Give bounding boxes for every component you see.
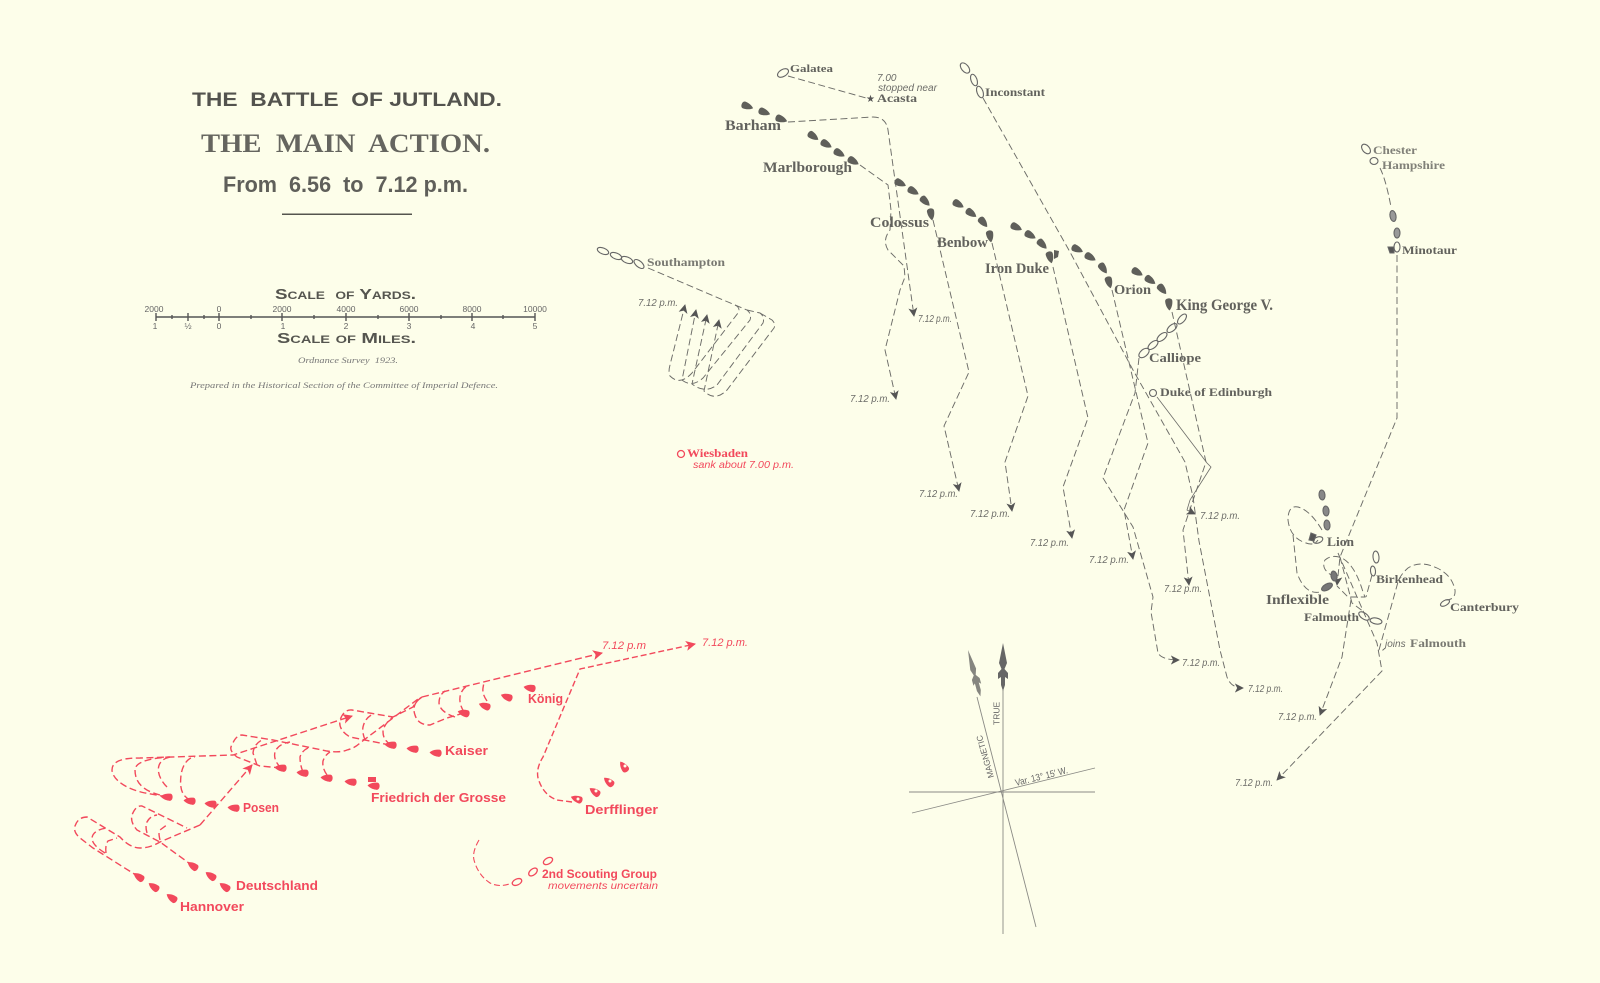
track: falmouth short	[1340, 557, 1364, 612]
yards labels: 2000	[145, 304, 164, 314]
track: southampton 2	[682, 305, 751, 384]
track: duke of edinburgh	[1157, 397, 1211, 514]
label: barham: Barham	[725, 118, 782, 134]
ships: inflexible and birkenhead	[1320, 551, 1380, 593]
track: inner loop	[1324, 556, 1365, 597]
ships: barham squadron	[740, 101, 788, 125]
ships: king george v squadron	[1130, 266, 1173, 311]
label: calliope: Calliope	[1149, 351, 1202, 365]
label: acasta: Acasta	[877, 93, 917, 105]
label: falmouth join: Falmouth	[1410, 638, 1467, 650]
track: friedrich lead	[231, 699, 418, 768]
label: orion: Orion	[1114, 283, 1151, 298]
ships: derfflinger squadron	[570, 760, 630, 804]
track: colossus	[933, 220, 969, 491]
note: stopped near: stopped near	[878, 83, 938, 94]
label: wiesbaden: Wiesbaden	[687, 448, 749, 460]
track: kaiser loops	[340, 697, 422, 745]
label: true: TRUE	[992, 702, 1002, 725]
note: acasta time: 7.00	[877, 73, 897, 84]
credit: historical section: Prepared in the Historical Section of the Committee of Imperial Defence.	[189, 380, 498, 390]
yards labels: 0	[217, 304, 222, 314]
track: deutschland loops	[146, 815, 168, 840]
ships: hannover squadron	[132, 870, 179, 904]
time: derfflinger: 7.12 p.m.	[702, 637, 748, 649]
label: deutschland: Deutschland	[236, 878, 318, 893]
miles labels: 0	[217, 321, 222, 331]
miles labels: 5	[533, 321, 538, 331]
time: calliope: 7.12 p.m.	[1182, 658, 1220, 669]
ships: konig squadron	[457, 683, 536, 718]
scale line and ticks	[156, 313, 535, 321]
time: duke of edinburgh: 7.12 p.m.	[1200, 511, 1240, 522]
label: iron duke: Iron Duke	[985, 261, 1049, 277]
label: canterbury: Canterbury	[1450, 602, 1519, 614]
ships: 2nd scouting group	[511, 856, 554, 887]
miles labels: 4	[471, 321, 476, 331]
time: inconstant: 7.12 p.m.	[1248, 684, 1283, 695]
track: falmouth	[1320, 600, 1351, 715]
note: movements uncertain: movements uncertain	[548, 880, 658, 892]
time: konig: 7.12 p.m	[602, 640, 646, 652]
track: 2nd scouting group	[474, 840, 512, 886]
miles labels: 2	[344, 321, 349, 331]
ship: duke of edinburgh	[1150, 390, 1156, 396]
label: king george v: King George V.	[1176, 297, 1273, 314]
yards labels: 6000	[400, 304, 419, 314]
miles labels	[153, 321, 538, 331]
yards labels: 10000	[523, 304, 547, 314]
label: benbow: Benbow	[937, 235, 988, 251]
german labels	[180, 637, 748, 914]
compass lines	[909, 690, 1095, 934]
yards labels: 8000	[463, 304, 482, 314]
note: joins: joins	[1383, 639, 1406, 650]
scale bar	[145, 286, 547, 390]
ships: falmouth and canterbury	[1357, 598, 1451, 625]
label: hannover: Hannover	[180, 899, 244, 914]
track: posen loops	[135, 757, 195, 800]
credit: ordnance survey: Ordnance Survey 1923.	[298, 355, 398, 365]
track: galatea to acasta	[788, 76, 866, 98]
label: variation: Var. 13° 15′ W.	[1014, 765, 1069, 789]
label: lion: Lion	[1327, 534, 1355, 549]
label: derfflinger: Derfflinger	[585, 802, 658, 817]
miles labels: 1	[281, 321, 286, 331]
label: marlborough: Marlborough	[763, 160, 853, 176]
ships: chester, hampshire, minotaur	[1360, 143, 1400, 253]
track: deutschland	[132, 765, 252, 866]
ships: deutschland squadron	[186, 859, 232, 893]
label: posen: Posen	[243, 800, 279, 815]
yards labels: 4000	[337, 304, 356, 314]
track: hannover	[75, 817, 200, 877]
ships: marlborough squadron	[806, 130, 860, 167]
ships: benbow squadron	[951, 198, 995, 243]
arrow: true north	[998, 643, 1008, 691]
heading: scale of yards: Scale of Yards.	[275, 286, 416, 303]
wiesbaden	[678, 448, 794, 471]
track: southampton 1	[648, 268, 739, 380]
track: chester to minotaur	[1337, 168, 1397, 585]
label: southampton: Southampton	[647, 257, 726, 269]
time: king george v: 7.12 p.m.	[1164, 584, 1202, 595]
ships: orion squadron	[1070, 243, 1114, 289]
track: hannover loops	[92, 828, 117, 853]
track: konig main line	[422, 653, 602, 697]
ship: wiesbaden	[678, 450, 684, 458]
ships: colossus squadron	[893, 177, 936, 221]
time: barham: 7.12 p.m.	[918, 314, 952, 325]
label: chester: Chester	[1373, 145, 1417, 157]
ships: iron duke squadron	[1009, 221, 1059, 264]
time: lion: 7.12 p.m.	[1235, 778, 1273, 789]
label: birkenhead: Birkenhead	[1376, 574, 1444, 586]
yards labels	[145, 304, 547, 314]
track: southampton 3	[692, 310, 764, 389]
track: inconstant	[983, 98, 1243, 688]
time: falmouth: 7.12 p.m.	[1278, 712, 1317, 723]
note: sank about 7.00 p.m.: sank about 7.00 p.m.	[693, 459, 794, 471]
miles labels: ½	[184, 321, 192, 331]
title block	[192, 89, 502, 215]
british labels	[647, 63, 1519, 650]
compass	[909, 643, 1095, 934]
yards labels: 2000	[273, 304, 292, 314]
track: calliope	[1103, 358, 1179, 660]
miles labels: 1	[153, 321, 158, 331]
time: orion: 7.12 p.m.	[1089, 555, 1129, 566]
german fleet tracks	[75, 644, 695, 886]
label: colossus: Colossus	[870, 215, 929, 231]
track: derfflinger	[538, 644, 695, 802]
time: benbow: 7.12 p.m.	[970, 509, 1010, 520]
label: minotaur: Minotaur	[1402, 245, 1457, 257]
track: konig loops	[414, 682, 487, 725]
subtitle: the main action: THE MAIN ACTION.	[201, 129, 490, 158]
label: kaiser: Kaiser	[445, 743, 488, 758]
time: iron duke: 7.12 p.m.	[1030, 538, 1069, 549]
track: benbow	[992, 243, 1028, 511]
label: 2nd scouting group: 2nd Scouting Group	[542, 867, 657, 881]
ships: posen squadron	[160, 793, 240, 812]
track: inflexible	[1293, 535, 1327, 592]
heading: scale of miles: Scale of Miles.	[277, 330, 416, 347]
british time labels	[638, 298, 1317, 789]
ships: kaiser squadron	[384, 741, 442, 757]
miles labels: 3	[407, 321, 412, 331]
track: lion loop	[1288, 507, 1322, 544]
track: marlborough	[860, 165, 905, 399]
track: friedrich loops	[253, 740, 330, 775]
label: hampshire: Hampshire	[1382, 160, 1445, 172]
label: galatea: Galatea	[790, 63, 834, 75]
time: southampton: 7.12 p.m.	[638, 298, 678, 309]
track: birkenhead	[1366, 575, 1372, 597]
label: friedrich der grosse: Friedrich der Grosse	[371, 790, 506, 805]
title: the battle of jutland: THE BATTLE OF JUTLAND.	[192, 89, 502, 111]
track: iron duke	[1053, 267, 1088, 538]
label: konig: König	[528, 691, 563, 706]
ships: galatea and inconstant	[776, 61, 985, 99]
track: king george v	[1172, 312, 1206, 585]
ships: southampton squadron	[596, 246, 646, 270]
title rule	[282, 214, 412, 215]
label: falmouth: Falmouth	[1304, 612, 1360, 624]
time: marlborough: 7.12 p.m.	[850, 394, 890, 405]
label: duke of edinburgh: Duke of Edinburgh	[1160, 385, 1272, 399]
ships: friedrich squadron	[274, 764, 380, 790]
label: magnetic: MAGNETIC	[974, 734, 996, 779]
british fleet tracks	[648, 76, 1455, 780]
time: colossus: 7.12 p.m.	[919, 489, 958, 500]
label: acasta star: ★	[866, 94, 875, 105]
track: orion	[1112, 290, 1148, 559]
track: barham	[788, 117, 914, 316]
arrow: magnetic north	[964, 649, 984, 697]
label: inflexible: Inflexible	[1266, 592, 1329, 607]
label: inconstant: Inconstant	[985, 87, 1045, 99]
track: posen outer loop to arrow	[112, 716, 352, 797]
track: canterbury	[1379, 564, 1455, 651]
german ships	[132, 683, 630, 904]
track: southampton 4	[704, 313, 775, 396]
subtitle: time range: From 6.56 to 7.12 p.m.	[223, 172, 468, 197]
track: lion to 7.12	[1277, 553, 1382, 780]
ships: calliope squadron	[1137, 312, 1188, 360]
ships: lion squadron	[1309, 490, 1330, 545]
british ships	[596, 61, 1451, 625]
